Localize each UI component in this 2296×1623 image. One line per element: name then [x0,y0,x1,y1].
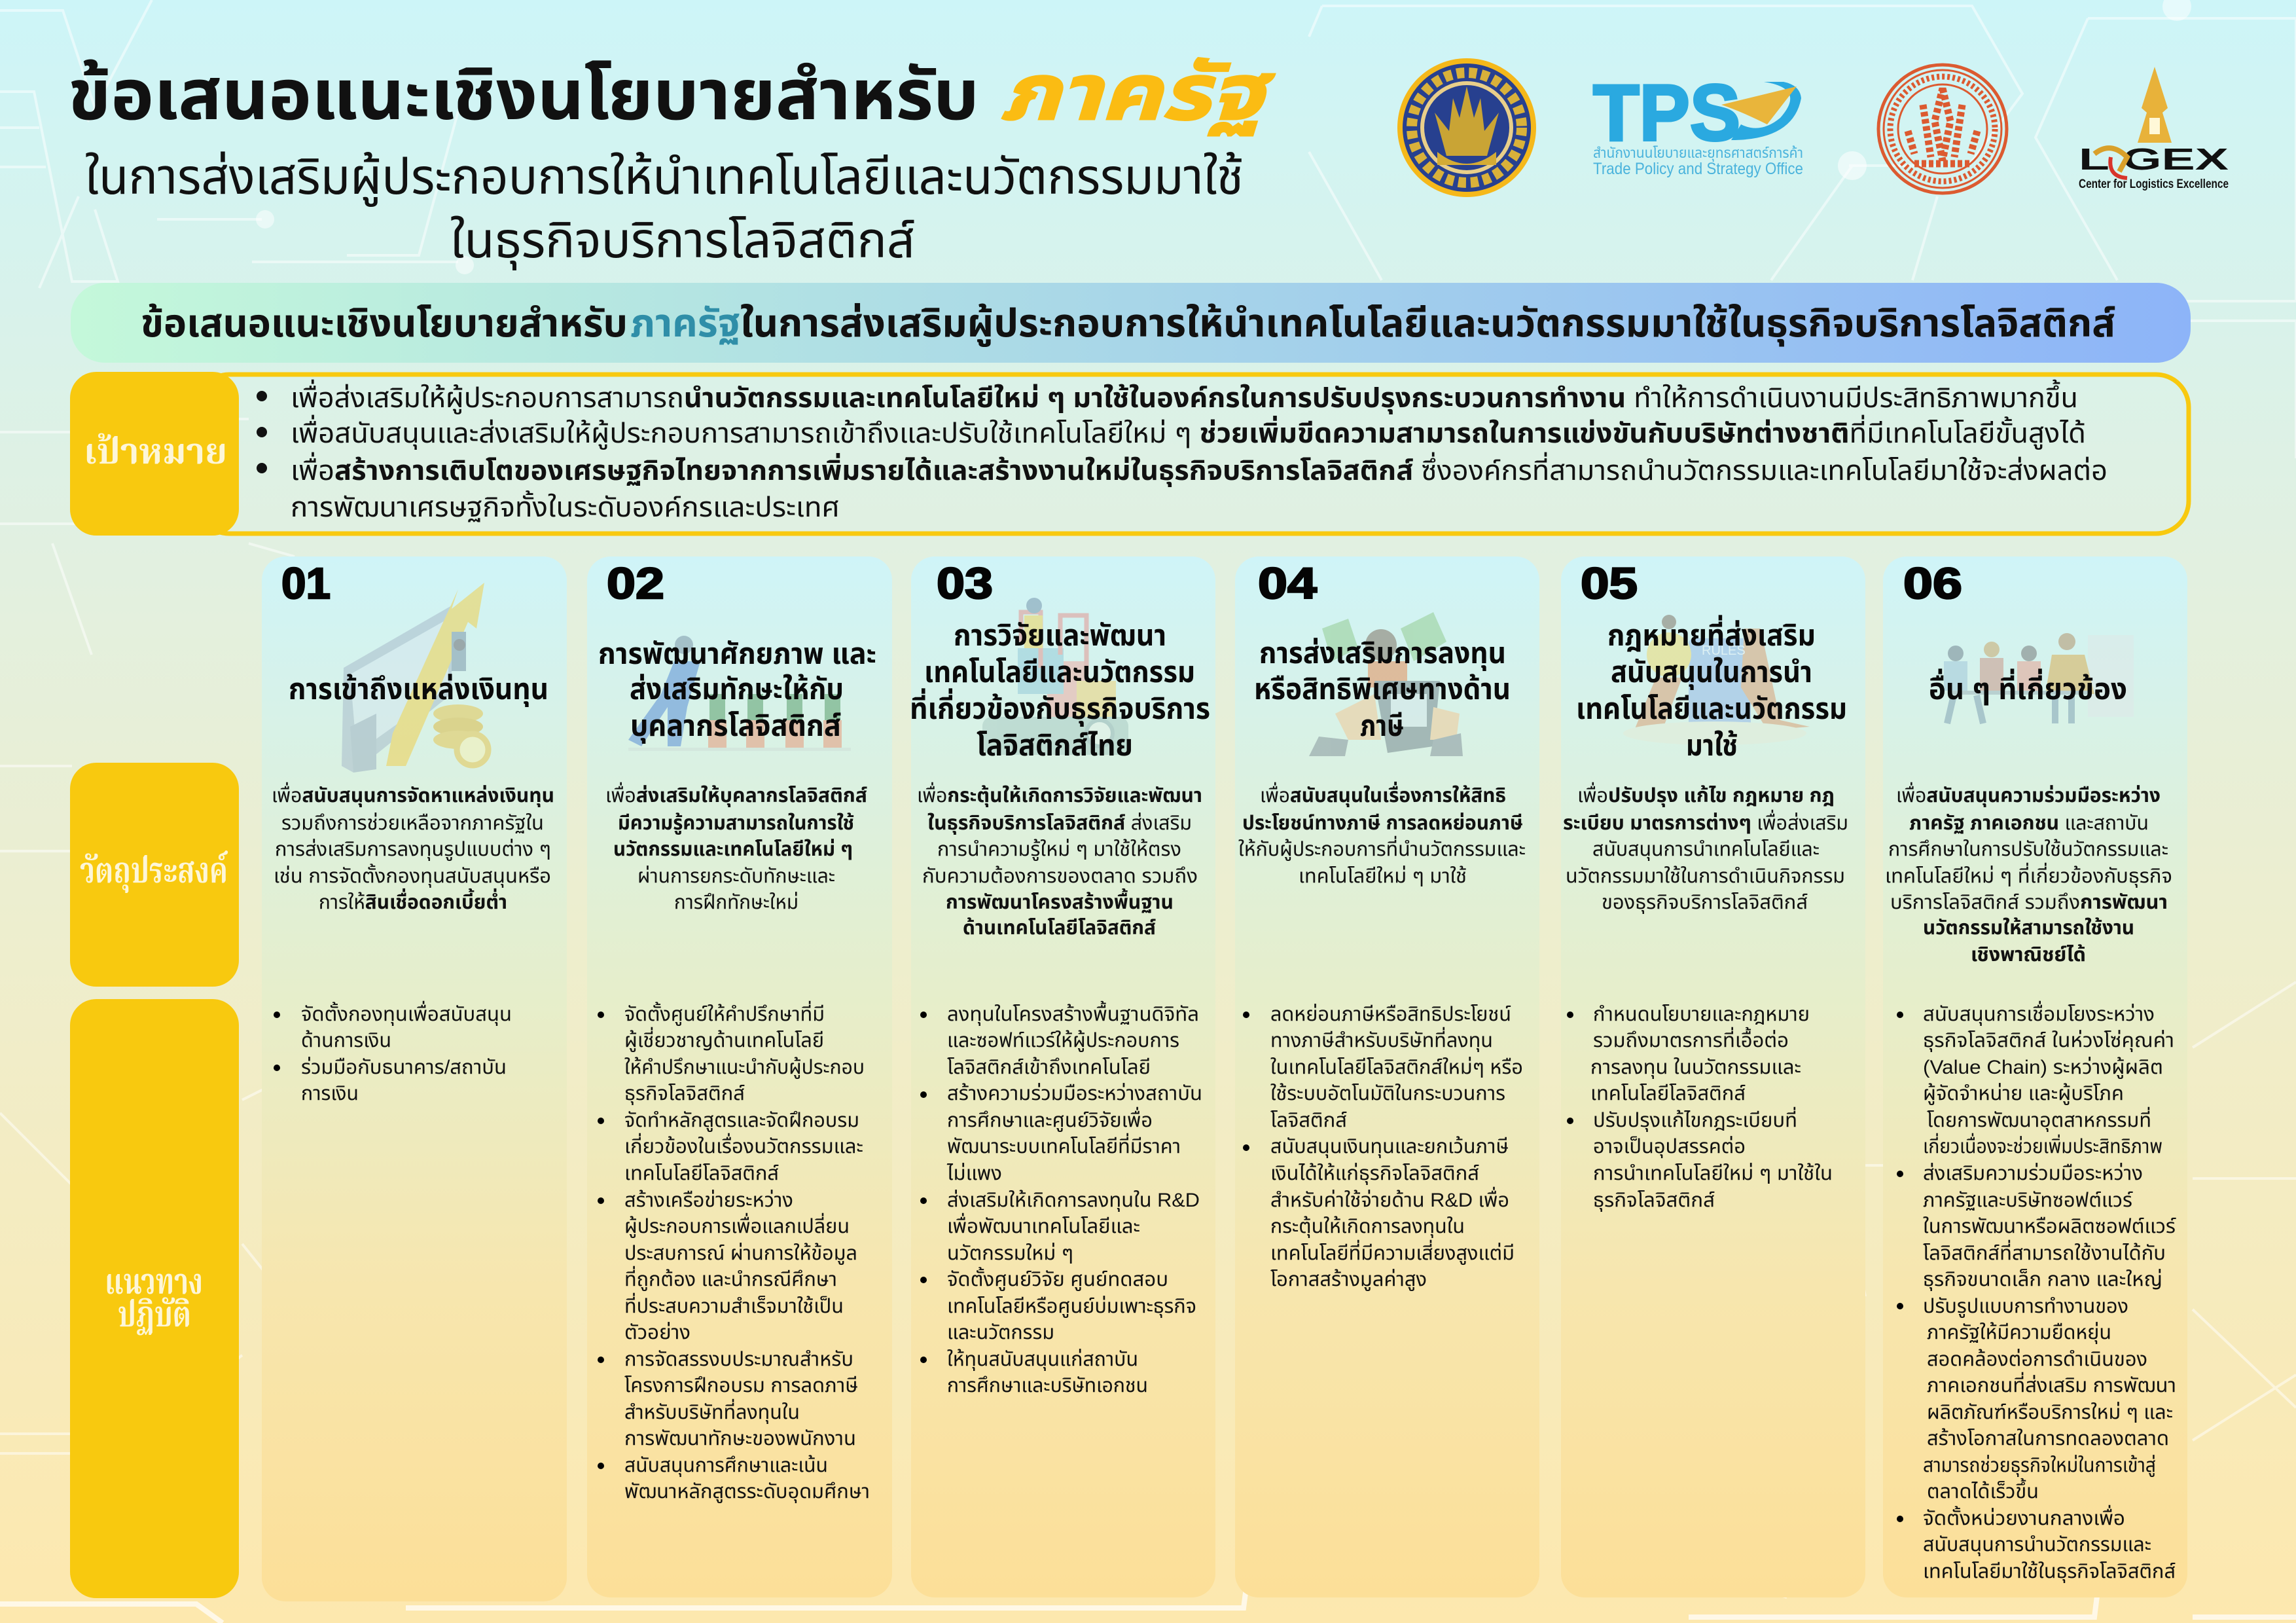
guideline list [274,1000,512,1104]
logo: LOGEX: L GEX [2079,142,2229,176]
icon: people and plants [628,636,851,751]
objective text: เพื่อสนับสนุนความร่วมมือระหว่าง [1896,782,2161,807]
objective text: มีความรู้ความสามารถในการใช้ [618,812,854,835]
heading: ภาษี [1360,709,1404,742]
guideline list: เกี่ยวเนื่องจะช่วยเพิ่มประสิทธิภาพ [1923,1133,2162,1158]
label: objectives: วัตถุประสงค์ [80,851,228,893]
subtitle: ในการส่งเสริมผู้ประกอบการให้นำเทคโนโลยีและนวัตกรรมมาใช้ [85,149,1244,207]
number: 05 [1581,559,1638,608]
objective text: การนำความรู้ใหม่ ๆ มาใช้ให้ตรง [937,839,1181,861]
logo: LOGEX [2079,67,2229,191]
number: 06 [1903,559,1962,608]
objective text: ประโยชน์ทางภาษี การลดหย่อนภาษี [1242,812,1523,834]
guideline list: ผลิตภัณฑ์หรือบริการใหม่ ๆ และ [1927,1402,2173,1423]
objective text: การพัฒนาโครงสร้างพื้นฐาน [946,888,1174,913]
guideline list [1243,1004,1523,1291]
label: objectives [70,763,239,987]
guideline list: พัฒนาหลักสูตรระดับอุดมศึกษา [624,1481,870,1503]
logo: ministry seal [1397,58,1536,197]
guideline list: สร้างความร่วมมือระหว่างสถาบัน [947,1083,1202,1104]
icon: meeting [1944,633,2134,723]
goals list: เพื่อสนับสนุนและส่งเสริมให้ผู้ประกอบการสามารถเข้าถึงและปรับใช้เทคโนโลยีใหม่ ๆ ช่วยเพิ่มขีดความสามารถในการแข่งขันกับบริษัทต่างชาติ ที่มีเทคโนโลยีขั้นสูงได้ [291,414,2086,450]
guideline list: จัดตั้งกองทุนเพื่อสนับสนุน [301,1000,512,1026]
guideline list: การลงทุน ในนวัตกรรมและ [1590,1057,1801,1079]
guideline list: ตัวอย่าง [624,1322,691,1343]
guideline list: สนับสนุนการนำนวัตกรรมและ [1923,1534,2151,1556]
guideline list: ประสบการณ์ ผ่านการให้ข้อมูล [624,1243,857,1265]
objective text: รวมถึงการช่วยเหลือจากภาครัฐใน [281,812,544,834]
guideline list: เทคโนโลยีโลจิสติกส์ [1590,1083,1746,1104]
guideline list: การนำเทคโนโลยีใหม่ ๆ มาใช้ใน [1593,1163,1833,1184]
objective text: เพื่อสนับสนุนการจัดหาแหล่งเงินทุน [272,782,554,807]
guideline list: โลจิสติกส์ [1270,1110,1347,1131]
objective text: นวัตกรรมและเทคโนโลยีใหม่ ๆ [613,839,853,860]
guideline list: โดยการพัฒนาอุตสาหกรรมที่ [1927,1106,2151,1132]
guideline list: เทคโนโลยีหรือศูนย์บ่มเพาะธุรกิจ [947,1296,1196,1318]
guideline list [1897,1000,2177,1583]
guideline list: ผู้เชี่ยวชาญด้านเทคโนโลยี [624,1027,824,1052]
goals list [257,379,2108,522]
heading: โลจิสติกส์ไทย [977,729,1133,762]
number: 01 [281,559,331,608]
guideline list: จัดตั้งหน่วยงานกลางเพื่อ [1923,1504,2125,1529]
guideline list: จัดตั้งศูนย์วิจัย ศูนย์ทดสอบ [947,1267,1168,1291]
guideline list: และนวัตกรรม [947,1322,1054,1343]
number: 04 [1258,559,1317,608]
objective text: ให้กับผู้ประกอบการที่นำนวัตกรรมและ [1238,835,1526,861]
guideline list: สามารถช่วยธุรกิจใหม่ในการเข้าสู่ [1923,1455,2156,1477]
heading [1254,636,1511,742]
banner highlight: ภาครัฐ [630,301,740,345]
guideline list: เทคโนโลยีโลจิสติกส์ [624,1163,779,1184]
panel: 06 others [1883,556,2187,1597]
heading: เทคโนโลยีและนวัตกรรม [924,655,1195,689]
objective text: นวัตกรรมมาใช้ในการดำเนินกิจกรรม [1566,866,1845,887]
heading: เทคโนโลยีและนวัตกรรม [1576,692,1847,725]
objective text [272,782,554,913]
guideline list: อาจเป็นอุปสรรคต่อ [1593,1136,1746,1158]
icon: research team [982,598,1128,755]
heading [598,637,876,744]
banner [71,283,2191,363]
number: 02 [607,559,664,608]
guideline list: ธุรกิจขนาดเล็ก กลาง และใหญ่ [1923,1269,2162,1291]
panel: 04 tax incentives [1235,556,1539,1597]
logo: TPSO: TPS [1593,68,1740,157]
guideline list: สนับสนุนเงินทุนและยกเว้นภาษี [1270,1136,1509,1158]
guideline list: ธุรกิจโลจิสติกส์ [624,1083,745,1105]
guideline list: เงินได้ให้แก่ธุรกิจโลจิสติกส์ [1270,1163,1479,1185]
objective text [1885,782,2172,966]
guideline list: จัดทำหลักสูตรและจัดฝึกอบรม [624,1110,859,1132]
guideline list: ปรับปรุงแก้ไขกฎระเบียบที่ [1593,1106,1797,1132]
objective text: การให้สินเชื่อดอกเบี้ยต่ำ [319,888,507,913]
guideline list: โครงการฝึกอบรม การลดภาษี [624,1375,858,1396]
heading: บุคลากรโลจิสติกส์ [630,709,841,744]
objective text: เพื่อสนับสนุนในเรื่องการให้สิทธิ [1260,781,1506,807]
guideline list: สร้างโอกาสในการทดลองตลาด [1927,1428,2169,1450]
guideline list: ปรับรูปแบบการทำงานของ [1923,1296,2128,1318]
heading: สนับสนุนในการนำ [1611,655,1812,690]
guideline list: เกี่ยวข้องในเรื่องนวัตกรรมและ [624,1133,863,1158]
guideline list: ในเทคโนโลยีโลจิสติกส์ใหม่ๆ หรือ [1270,1057,1523,1078]
guideline list: ลงทุนในโครงสร้างพื้นฐานดิจิทัล [947,1000,1199,1026]
goals list: การพัฒนาเศรษฐกิจทั้งในระดับองค์กรและประเทศ [291,490,840,522]
subtitle: ในธุรกิจบริการโลจิสติกส์ [450,213,915,270]
guideline list: ให้คำปรึกษาแนะนำกับผู้ประกอบ [624,1057,865,1079]
guideline list [598,1000,870,1503]
objective text: เทคโนโลยีใหม่ ๆ มาใช้ [1299,866,1467,887]
guideline list: ส่งเสริมความร่วมมือระหว่าง [1923,1163,2143,1184]
guideline list: จัดตั้งศูนย์ให้คำปรึกษาที่มี [624,1000,825,1026]
panel: 03 research [910,556,1215,1597]
banner: ในการส่งเสริมผู้ประกอบการให้นำเทคโนโลยีและนวัตกรรมมาใช้ในธุรกิจบริการโลจิสติกส์ [740,301,2115,347]
objective text: เพื่อกระตุ้นให้เกิดการวิจัยและพัฒนา [917,782,1202,807]
logo: university seal [1878,65,2007,193]
objective text: เชิงพาณิชย์ได้ [1971,944,2086,966]
guideline list: กระตุ้นให้เกิดการลงทุนใน [1270,1216,1465,1238]
title [68,50,1275,136]
goals list: เพื่อสร้างการเติบโตของเศรษฐกิจไทยจากการเพิ่มรายได้และสร้างงานใหม่ในธุรกิจบริการโลจิสติกส์ ซึ่งองค์กรที่สามารถนำนวัตกรรมและเทคโนโลยีมาใช้จะส่งผลต่อ [291,452,2108,487]
goals list: เพื่อส่งเสริมให้ผู้ประกอบการสามารถ นำนวัตกรรมและเทคโนโลยีใหม่ ๆ มาใช้ในองค์กรในการปรับปรุงกระบวนการทำงาน ทำให้การดำเนินงานมีประสิทธิภาพมากขึ้น [291,379,2078,414]
guideline list: สำหรับบริษัทที่ลงทุนใน [624,1398,800,1424]
objective text: การฝึกทักษะใหม่ [674,892,798,913]
guideline list: กำหนดนโยบายและกฎหมาย [1593,1004,1810,1025]
panel: 01 finance [262,556,567,1601]
guideline list: ให้ทุนสนับสนุนแก่สถาบัน [947,1349,1138,1371]
heading: กฎหมายที่ส่งเสริม [1607,615,1816,652]
panel: 05 law [1561,556,1865,1597]
heading: ที่เกี่ยวข้องกับธุรกิจบริการ [910,688,1210,727]
guideline list: เพื่อพัฒนาเทคโนโลยีและ [947,1213,1140,1237]
objective text: ระเบียบ มาตรการต่างๆ เพื่อส่งเสริม [1563,809,1848,834]
guideline list: ไม่แพง [946,1163,1002,1184]
heading: มาใช้ [1686,729,1738,762]
objective text: เช่น การจัดตั้งกองทุนสนับสนุนหรือ [274,864,551,888]
logo: LOGEX: Center for Logistics Excellence [2079,177,2229,191]
guideline list: ร่วมมือกับธนาคาร/สถาบัน [301,1057,507,1078]
heading: หรือสิทธิพิเศษทางด้าน [1254,672,1511,706]
guideline list: การศึกษาและศูนย์วิจัยเพื่อ [947,1106,1153,1132]
guideline list: ที่ถูกต้อง และนำกรณีศึกษา [624,1266,837,1291]
title highlight: ภาครัฐ [1000,50,1275,136]
heading: การวิจัยและพัฒนา [954,619,1166,652]
heading: การเข้าถึงแหล่งเงินทุน [289,672,548,707]
label: guidelines [70,999,239,1598]
guideline list: ผู้จัดจำหน่าย และผู้บริโภค [1923,1083,2124,1105]
objective text: ของธุรกิจบริการโลจิสติกส์ [1602,892,1808,914]
panel: 02 human capital [587,556,892,1597]
logos [1397,58,2229,197]
guideline list [1567,1004,1833,1212]
logo: TPSO: สำนักงานนโยบายและยุทธศาสตร์การค้า [1593,145,1803,162]
guideline list: พัฒนาระบบเทคโนโลยีที่มีราคา [947,1133,1181,1158]
guideline list: โลจิสติกส์ที่สามารถใช้งานได้กับ [1923,1239,2166,1264]
icon: rules people [1623,615,1810,745]
guideline list: การพัฒนาทักษะของพนักงาน [624,1428,856,1450]
guideline list: ใช้ระบบอัตโนมัติในกระบวนการ [1270,1083,1505,1104]
heading: การพัฒนาศักยภาพ และ [598,637,876,670]
icon: money and calculator [1309,612,1463,756]
objective text: นวัตกรรมให้สามารถใช้งาน [1923,917,2134,939]
guideline list: ตลาดได้เร็วขึ้น [1927,1478,2039,1503]
guideline list: ธุรกิจโลจิสติกส์ [1593,1190,1715,1212]
guideline list: ในการพัฒนาหรือผลิตซอฟต์แวร์ [1923,1216,2177,1237]
objective text: กับความต้องการของตลาด รวมถึง [922,866,1198,887]
objective text: ผ่านการยกระดับทักษะและ [637,866,835,887]
guideline list: สนับสนุนการเชื่อมโยงระหว่าง [1923,1000,2155,1026]
panel: goals [70,372,2189,536]
objective text [1563,782,1848,914]
subtitle [85,149,1244,270]
objective text: เพื่อปรับปรุง แก้ไข กฎหมาย กฎ [1577,782,1835,807]
guideline list: ภาครัฐให้มีความยืดหยุ่น [1927,1322,2111,1344]
objective text: สนับสนุนการนำเทคโนโลยีและ [1592,839,1820,861]
guideline list: นวัตกรรมใหม่ ๆ [947,1243,1073,1264]
guideline list: ส่งเสริมให้เกิดการลงทุนใน R&D [947,1190,1200,1212]
guideline list: ภาคเอกชนที่ส่งเสริม การพัฒนา [1927,1372,2176,1396]
heading [910,619,1210,762]
icon: finance chart [342,583,488,773]
objective text [1238,781,1526,887]
title: ข้อเสนอแนะเชิงนโยบายสำหรับ [68,55,979,134]
icon: rules people: RULES [1702,644,1746,658]
guideline list: สำหรับค่าใช้จ่ายด้าน R&D เพื่อ [1270,1186,1509,1211]
guideline list: เทคโนโลยีมาใช้ในธุรกิจโลจิสติกส์ [1923,1561,2176,1583]
guideline list: ทางภาษีสำหรับบริษัทที่ลงทุน [1270,1027,1493,1052]
guideline list: ลดหย่อนภาษีหรือสิทธิประโยชน์ [1270,1004,1511,1025]
objective text: ภาครัฐ ภาคเอกชน และสถาบัน [1909,812,2149,834]
heading [1576,615,1847,762]
heading: การส่งเสริมการลงทุน [1259,636,1506,671]
guideline list: การศึกษาและบริษัทเอกชน [947,1375,1148,1396]
guideline list: ภาครัฐและบริษัทซอฟต์แวร์ [1923,1190,2133,1211]
goals label: เป้าหมาย [84,432,227,471]
guideline list: ผู้ประกอบการเพื่อแลกเปลี่ยน [624,1213,850,1238]
label: guidelines: ปฏิบัติ [118,1295,191,1335]
label: guidelines: แนวทาง [105,1262,203,1302]
objective text [917,782,1202,939]
guideline list: ด้านการเงิน [301,1030,391,1051]
objective text: การศึกษาในการปรับใช้นวัตกรรมและ [1888,839,2168,860]
objective text: ด้านเทคโนโลยีโลจิสติกส์ [963,917,1156,939]
heading: อื่น ๆ ที่เกี่ยวข้อง [1929,668,2127,706]
guideline list: เทคโนโลยีที่มีความเสี่ยงสูงแต่มี [1270,1239,1515,1265]
guideline list: การเงิน [301,1083,359,1104]
guideline list: ธุรกิจโลจิสติกส์ ในห่วงโซ่คุณค่า [1923,1030,2174,1052]
objective text: บริการโลจิสติกส์ รวมถึง การพัฒนา [1890,892,2168,913]
guideline list: โอกาสสร้างมูลค่าสูง [1270,1269,1427,1291]
guideline list: (Value Chain) ระหว่างผู้ผลิต [1923,1057,2163,1079]
objective text: เพื่อส่งเสริมให้บุคลากรโลจิสติกส์ [605,782,867,807]
objective text [605,782,867,913]
banner: ข้อเสนอแนะเชิงนโยบายสำหรับ [141,301,628,345]
guideline list: ที่ประสบความสำเร็จมาใช้เป็น [624,1292,844,1317]
guideline list: สอดคล้องต่อการดำเนินของ [1927,1349,2147,1370]
logo: TPSO: Trade Policy and Strategy Office [1593,160,1803,178]
guideline list: สร้างเครือข่ายระหว่าง [624,1190,793,1211]
objective text: ในธุรกิจบริการโลจิสติกส์ ส่งเสริม [927,812,1192,835]
objective text: เทคโนโลยีใหม่ ๆ ที่เกี่ยวข้องกับธุรกิจ [1885,862,2172,888]
guideline list: สนับสนุนการศึกษาและเน้น [624,1455,828,1477]
guideline list: และซอฟท์แวร์ให้ผู้ประกอบการ [947,1030,1179,1052]
number: 03 [937,559,993,608]
objective text: การส่งเสริมการลงทุนรูปแบบต่าง ๆ [275,839,551,861]
logo: TPSO [1593,68,1803,178]
guideline list: โลจิสติกส์เข้าถึงเทคโนโลยี [947,1057,1151,1078]
guideline list: การจัดสรรงบประมาณสำหรับ [624,1349,853,1370]
guideline list: รวมถึงมาตรการที่เอื้อต่อ [1593,1027,1789,1051]
heading: ส่งเสริมทักษะให้กับ [630,672,844,706]
guideline list [920,1000,1202,1396]
